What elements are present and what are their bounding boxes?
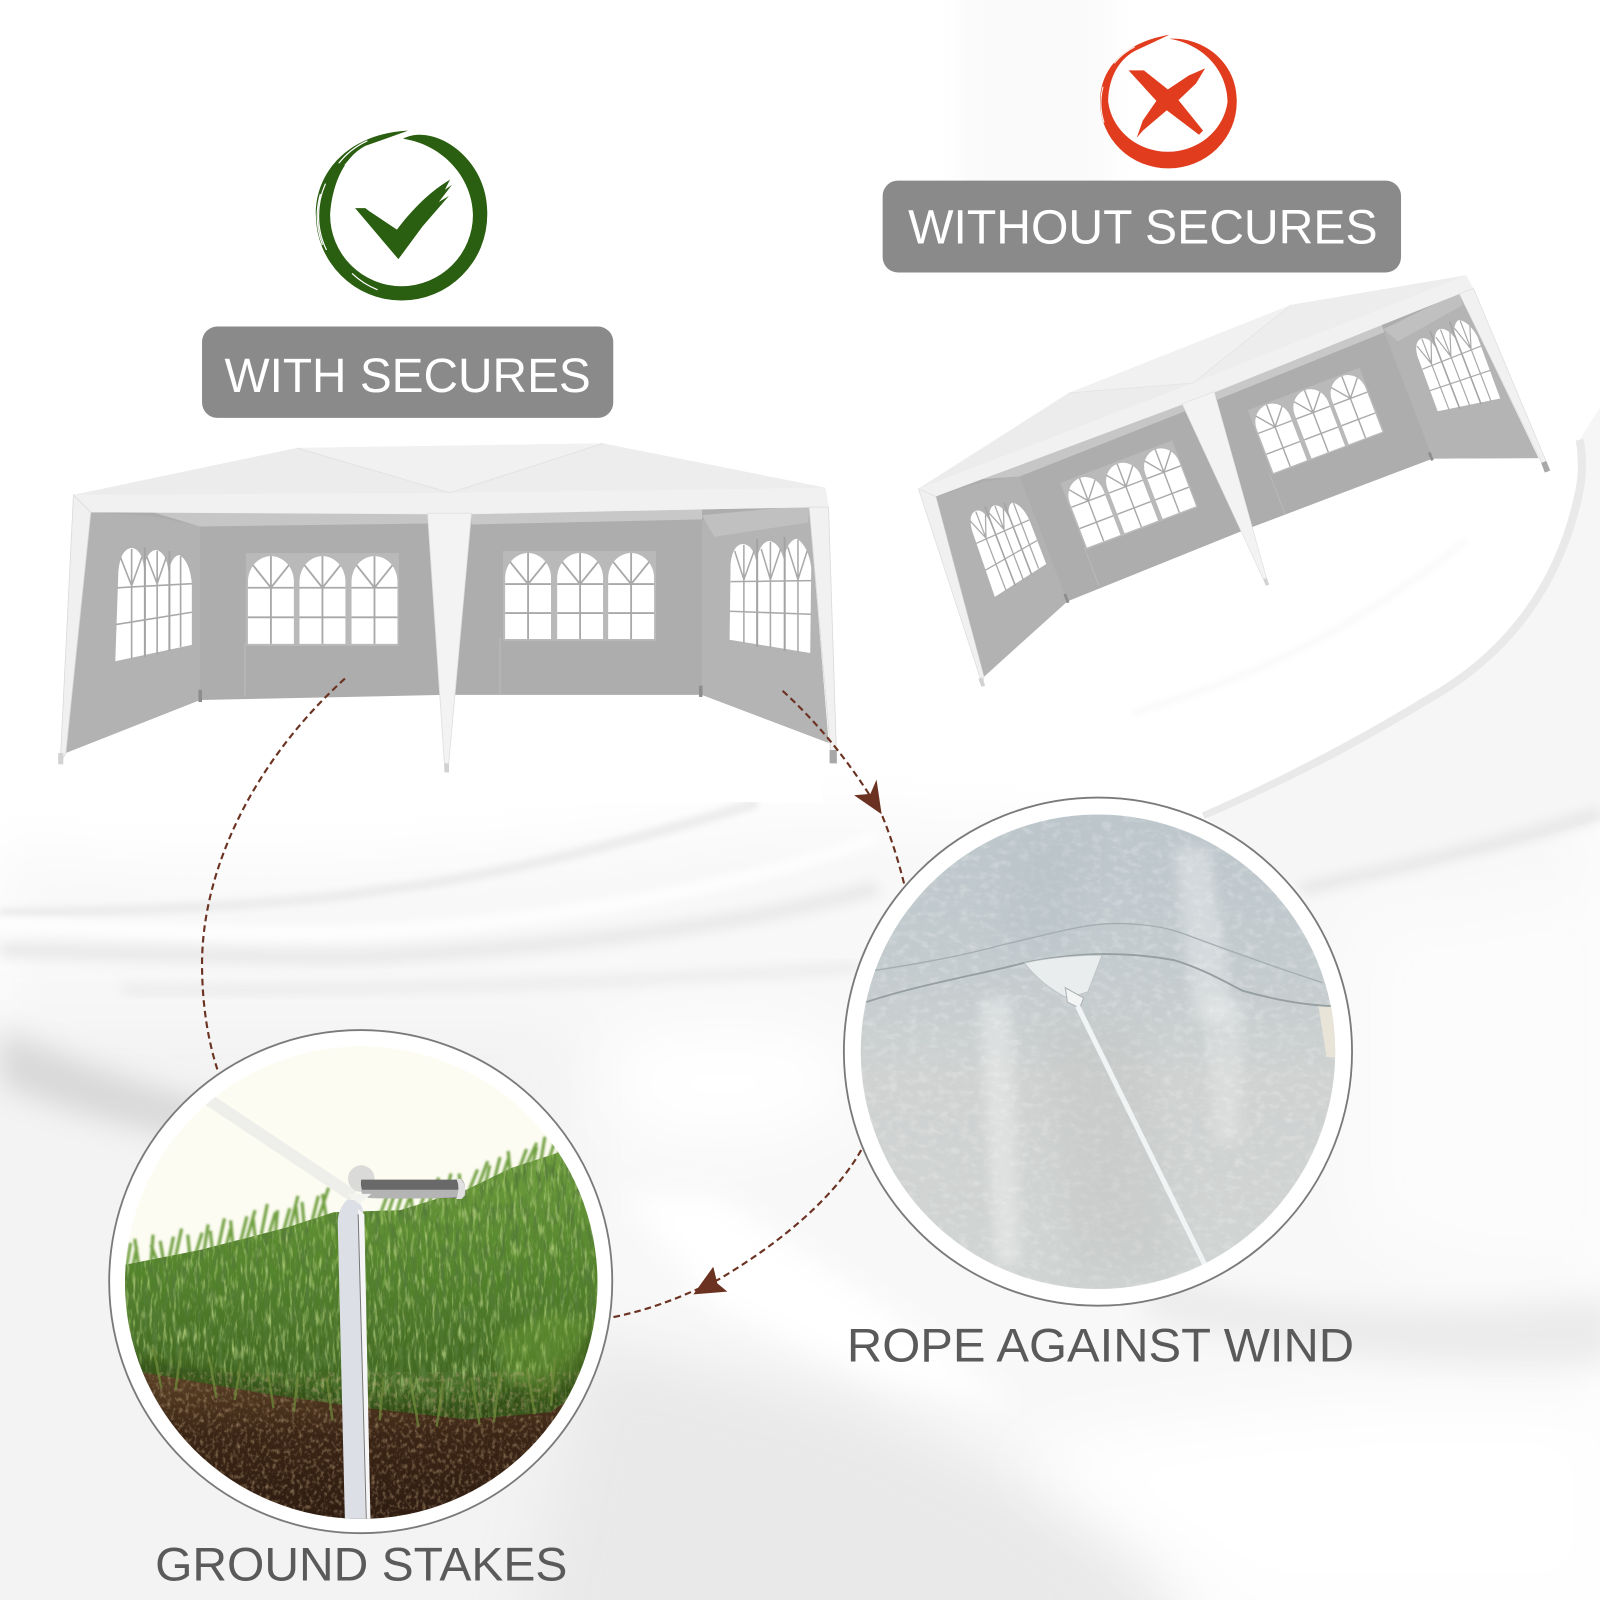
- arrow: tent to rope detail: [783, 691, 904, 884]
- pill label: with secures: [202, 327, 613, 418]
- pill label: without secures: WITHOUT SECURES: [908, 201, 1378, 254]
- panel: rope against wind photo circle: [844, 798, 1352, 1306]
- caption: rope against wind: ROPE AGAINST WIND: [847, 1320, 1354, 1372]
- pill label: with secures: WITH SECURES: [224, 350, 591, 403]
- icon: red cross in brush circle: [1100, 35, 1237, 168]
- panel: ground stakes photo circle: [109, 1030, 612, 1533]
- caption: ground stakes: GROUND STAKES: [155, 1539, 567, 1591]
- photo: tent without secures, tilted: [893, 240, 1553, 693]
- pill label: without secures: [883, 181, 1401, 272]
- icon: green check mark in brush circle: [316, 131, 487, 301]
- arrow: tent to ground stakes: [202, 679, 345, 1069]
- arrow: rope detail to ground stakes: [612, 1150, 861, 1317]
- photo: tent with secures, front view: [58, 443, 837, 772]
